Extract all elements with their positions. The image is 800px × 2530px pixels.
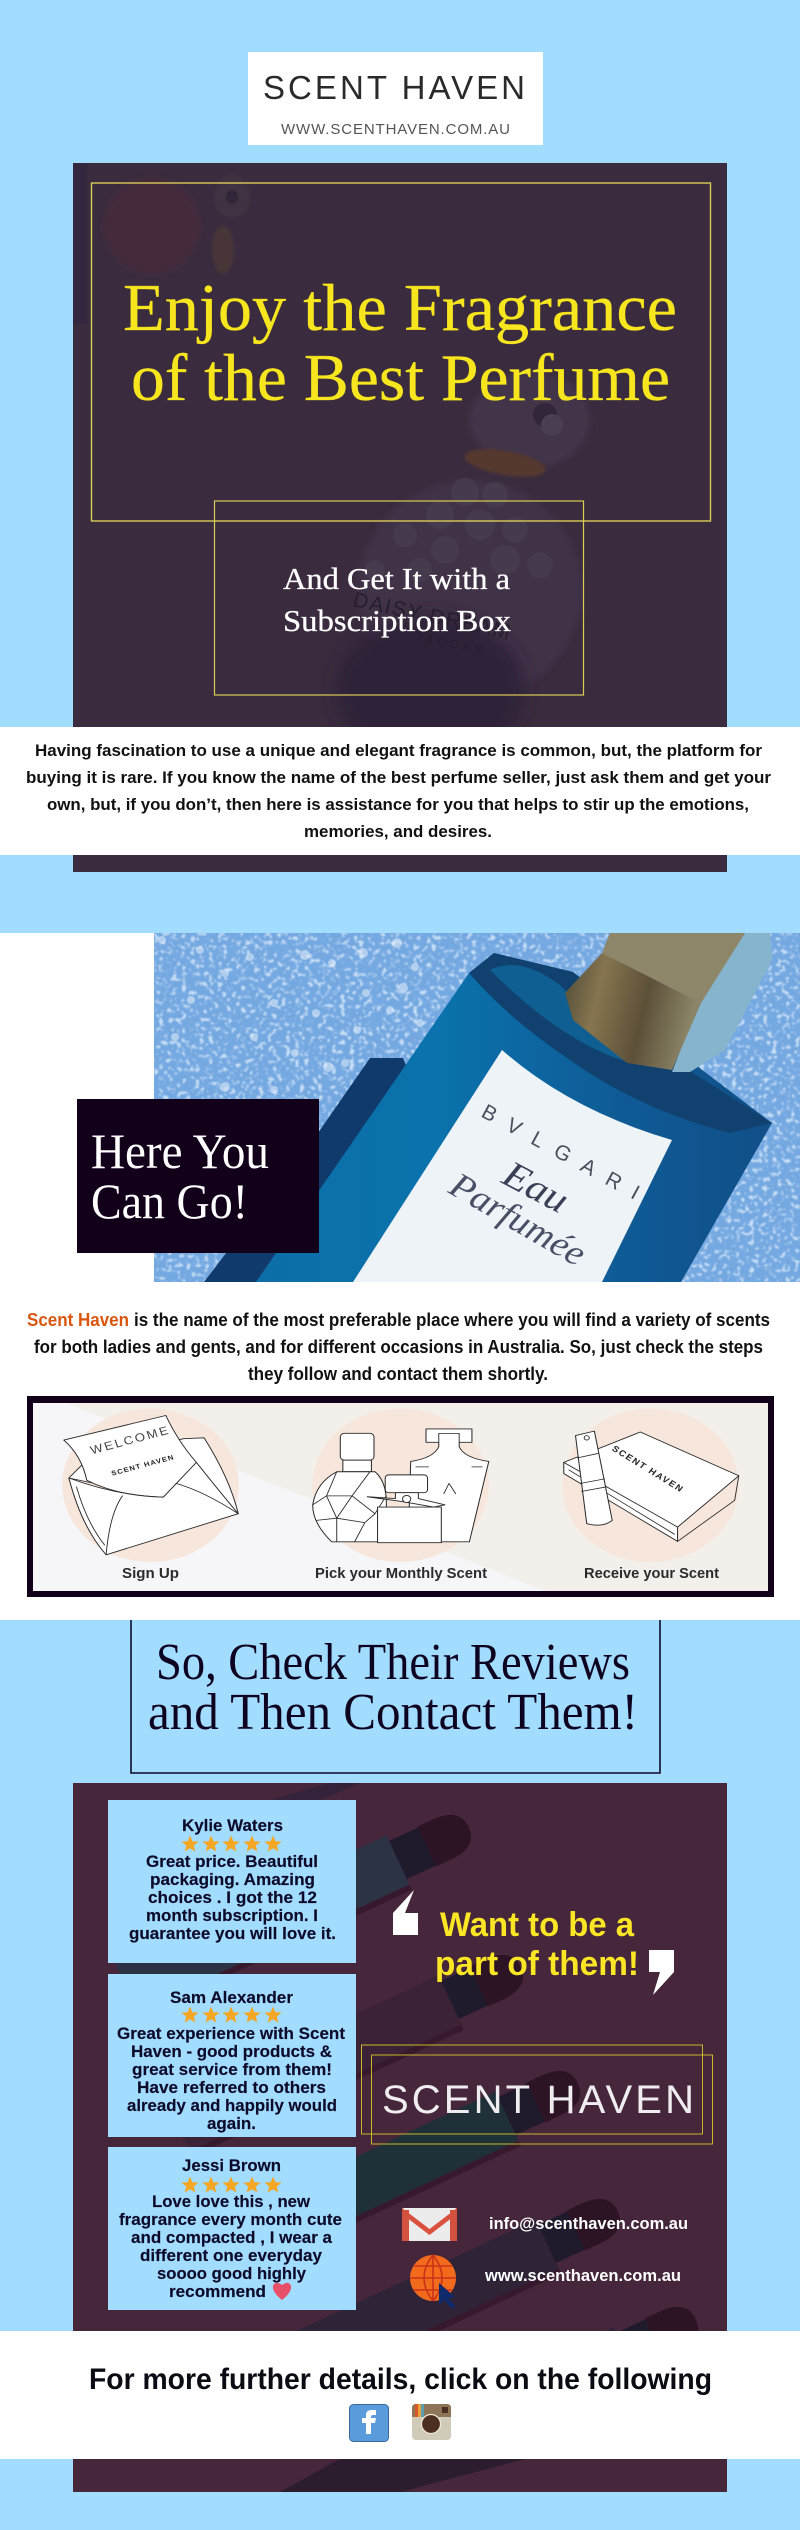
review card: Kylie Waters: month subscription. I — [146, 1906, 318, 1925]
intro text band — [0, 727, 800, 855]
intro text band: memories, and desires. — [304, 822, 492, 841]
photo: blue perfume bottle on glitter — [154, 933, 800, 1282]
description text: Scent Haven — [27, 1310, 129, 1330]
intro text band: buying it is rare. If you know the name of the best perfume seller, just ask them and get your — [26, 768, 771, 787]
title: of the Best Perfume — [131, 341, 670, 415]
heading: reviews: and Then Contact Them! — [148, 1684, 638, 1741]
title — [123, 271, 677, 415]
photo: blue perfume bottle on glitter: BVLGARI — [478, 1100, 643, 1204]
logo: white Scent Haven in frames — [362, 2045, 712, 2144]
subtitle — [283, 561, 512, 638]
intro text band: Having fascination to use a unique and elegant fragrance is common, but, the platform for — [35, 741, 762, 760]
step labels: Pick your Monthly Scent — [315, 1565, 487, 1582]
review card: Jessi Brown: Jessi Brown — [182, 2156, 281, 2175]
description text — [27, 1310, 770, 1384]
callout: want to be a part of them: Want to be a — [440, 1906, 635, 1944]
panel: hero: DAISY DREAM — [351, 588, 512, 644]
icon: welcome envelope — [62, 1408, 239, 1562]
review card: Sam Alexander: Have referred to others — [137, 2078, 326, 2097]
review card: Sam Alexander: Sam Alexander — [170, 1988, 293, 2007]
description text: for both ladies and gents, and for different occasions in Australia. So, just check the steps — [34, 1337, 763, 1357]
panel: hero — [73, 163, 727, 872]
icon: facebook — [350, 2404, 388, 2442]
review card: Sam Alexander: already and happily would — [127, 2096, 337, 2115]
callout: want to be a part of them: part of them! — [435, 1945, 639, 1983]
heading: Here You Can Go: Can Go! — [91, 1173, 248, 1229]
footer band: For more further details, click on the following — [89, 2363, 712, 2396]
step labels — [122, 1565, 719, 1582]
icon: perfume bottles — [312, 1408, 489, 1562]
subtitle: Subscription Box — [283, 603, 512, 638]
logo: Scent Haven: WWW.SCENTHAVEN.COM.AU — [281, 121, 510, 138]
step labels: Receive your Scent — [584, 1565, 719, 1582]
photo: blue perfume bottle on glitter: Parfumée — [442, 1164, 593, 1274]
review card: Jessi Brown — [108, 2147, 356, 2310]
review card: Sam Alexander: Haven - good products & — [131, 2042, 332, 2061]
intro text band: own, but, if you don’t, then here is assistance for you that helps to stir up the emotions, — [47, 795, 749, 814]
review card: Jessi Brown: fragrance every month cute — [119, 2210, 342, 2229]
logo: white Scent Haven in frames: SCENT HAVEN — [382, 2078, 694, 2122]
review card: Kylie Waters: choices . I got the 12 — [148, 1888, 317, 1907]
callout: want to be a part of them — [393, 1890, 674, 1995]
icon: subscription box — [562, 1408, 739, 1562]
title: Enjoy the Fragrance — [123, 271, 677, 345]
contact: website — [410, 2255, 681, 2308]
panel: reviews and contact — [73, 1783, 727, 2509]
review card: Jessi Brown: recommend — [169, 2282, 266, 2301]
logo: Scent Haven: SCENT HAVEN — [263, 69, 525, 106]
panel: hero: JACOBS — [414, 629, 484, 657]
review card: Sam Alexander: Great experience with Scent — [117, 2024, 345, 2043]
step labels: Sign Up — [122, 1565, 179, 1582]
review card: Kylie Waters — [108, 1800, 356, 1963]
contact: website: www.scenthaven.com.au — [484, 2266, 681, 2285]
heading: reviews — [131, 1620, 660, 1773]
title frame — [92, 183, 710, 521]
review card: Kylie Waters: Great price. Beautiful — [146, 1852, 318, 1871]
review card: Jessi Brown: different one everyday — [140, 2246, 323, 2265]
heading: reviews: So, Check Their Reviews — [156, 1634, 630, 1691]
icon: welcome envelope: SCENT HAVEN — [110, 1453, 175, 1478]
icon: instagram — [412, 2404, 451, 2440]
heading: Here You Can Go — [77, 1099, 319, 1253]
review card: Kylie Waters: packaging. Amazing — [150, 1870, 315, 1889]
footer band — [0, 2331, 800, 2459]
review card: Sam Alexander: again. — [207, 2114, 256, 2133]
description text: they follow and contact them shortly. — [248, 1364, 548, 1384]
contact: email: info@scenthaven.com.au — [489, 2214, 688, 2233]
heading: Here You Can Go: Here You — [91, 1123, 269, 1179]
logo: Scent Haven — [248, 52, 543, 145]
review card: Kylie Waters: Kylie Waters — [182, 1816, 283, 1835]
subtitle: And Get It with a — [283, 561, 510, 596]
review card: Sam Alexander — [108, 1974, 356, 2137]
icon: subscription box: SCENT HAVEN — [610, 1444, 686, 1494]
description text: is the name of the most preferable place where you will find a variety of scents — [134, 1310, 770, 1330]
panel: subscription steps — [27, 1396, 774, 1597]
review card: Jessi Brown: Love love this , new — [152, 2192, 311, 2211]
review card: Kylie Waters: guarantee you will love it. — [129, 1924, 336, 1943]
review card: Jessi Brown: soooo good highly — [157, 2264, 307, 2283]
review card: Jessi Brown: and compacted , I wear a — [131, 2228, 333, 2247]
subtitle frame — [214, 501, 584, 695]
contact: email — [402, 2208, 688, 2241]
review card: Sam Alexander: great service from them! — [132, 2060, 332, 2079]
icon: welcome envelope: WELCOME — [88, 1423, 172, 1457]
white section background — [0, 933, 800, 1620]
blue section background — [0, 1620, 800, 2530]
photo: blue perfume bottle on glitter: Eau — [495, 1152, 576, 1222]
